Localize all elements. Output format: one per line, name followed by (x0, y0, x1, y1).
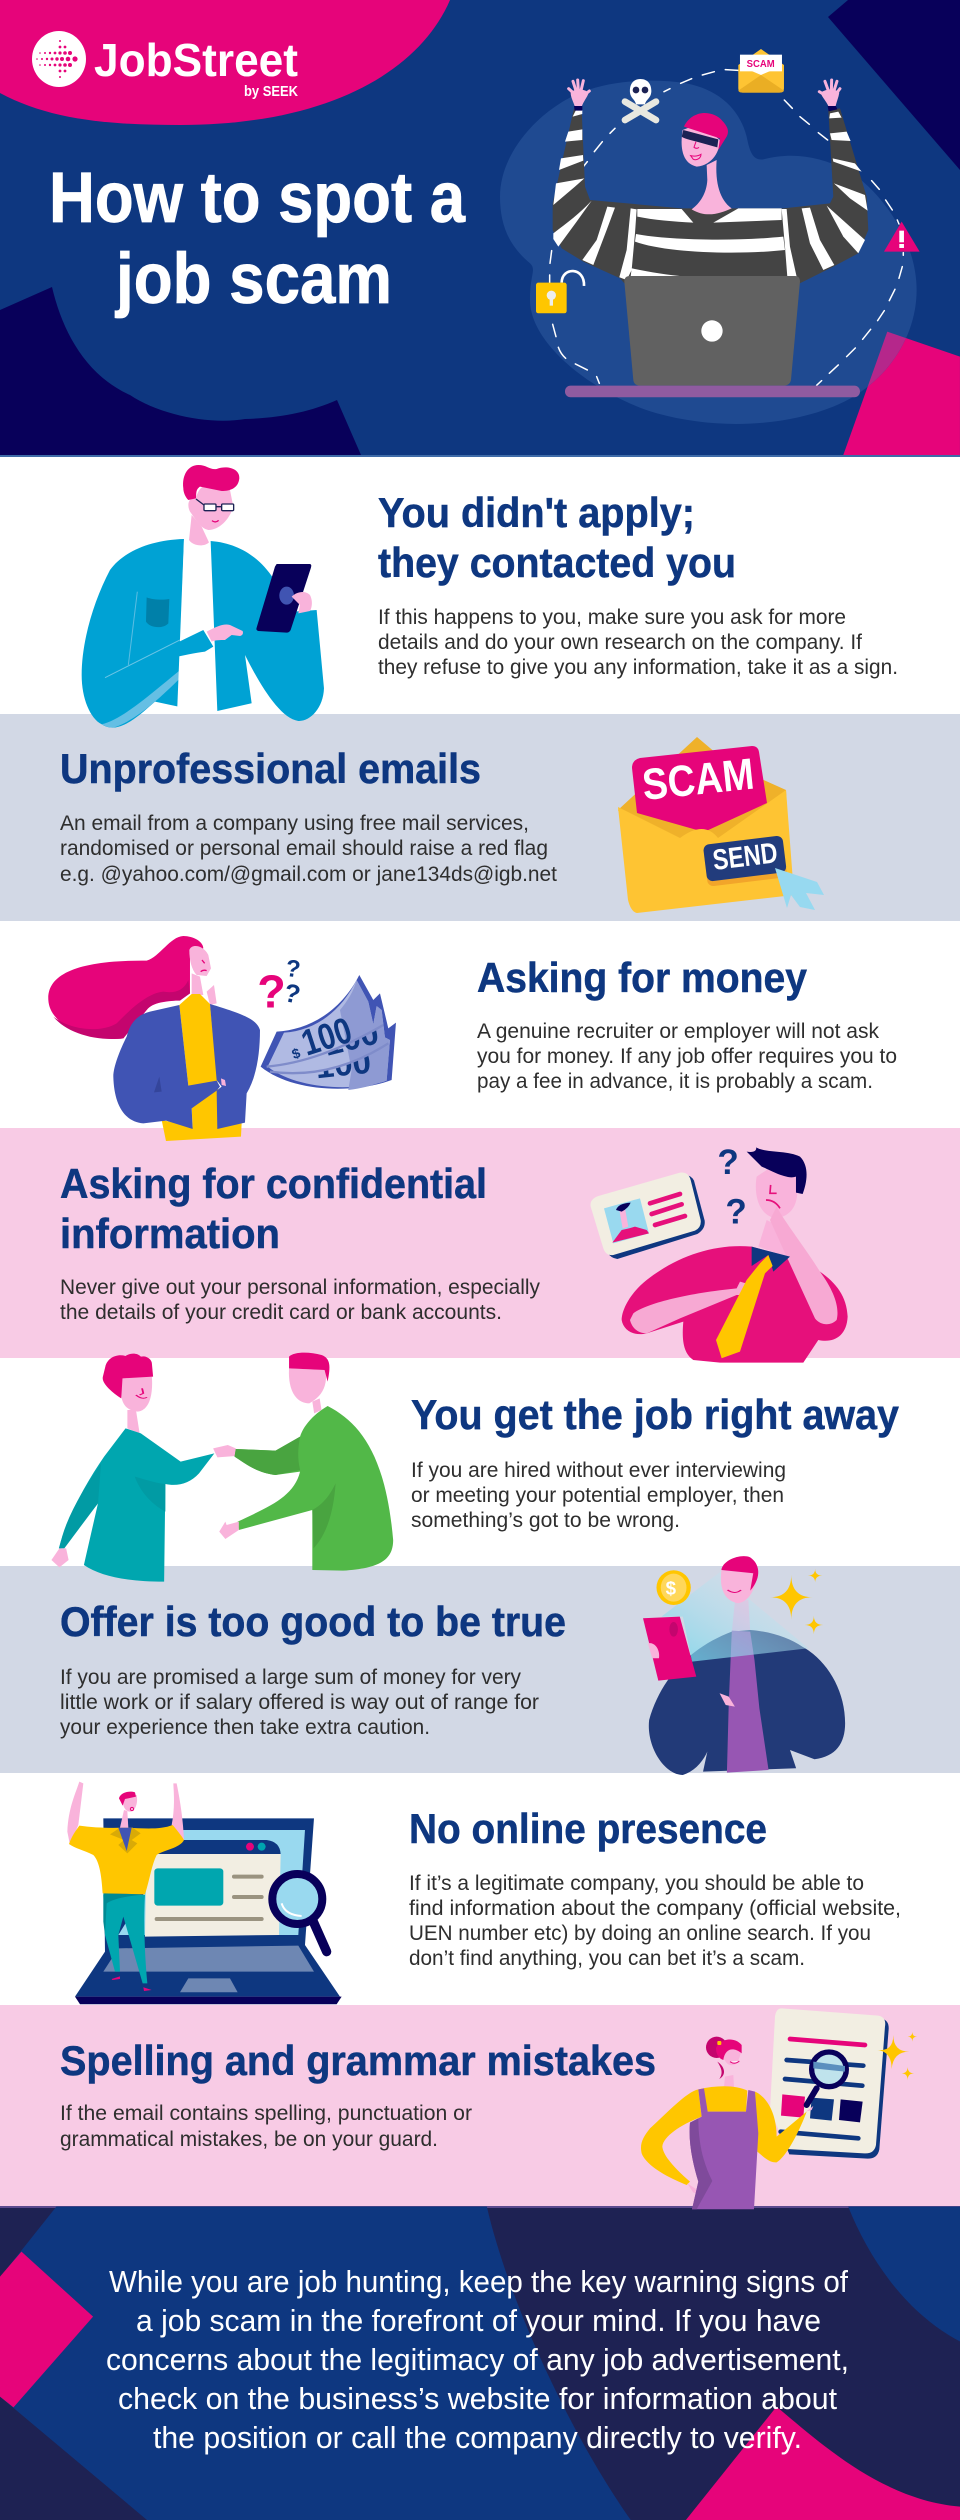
body text (60, 2102, 472, 2151)
panel: asking for confidential information (0, 1128, 960, 1358)
banknotes: $ (290, 1044, 303, 1062)
closing message (106, 2264, 849, 2455)
heading: You get the job right away (411, 1391, 900, 1438)
heading: You didn't apply; (378, 489, 695, 536)
head (692, 160, 732, 214)
magnifier (807, 2052, 846, 2105)
panel: asking for money (0, 921, 960, 1128)
body text: If this happens to you, make sure you ask for more (378, 606, 846, 629)
body text: UEN number etc) by doing an online search. If you (409, 1922, 871, 1945)
closing message: the position or call the company directly to verify. (153, 2420, 802, 2455)
question marks: ? (257, 965, 286, 1017)
illustration: laptop with magnifier and man (67, 1782, 342, 2004)
illustration: scammer at laptop (500, 49, 960, 455)
body text: If it’s a legitimate company, you should be able to (409, 1872, 864, 1895)
icon: open padlock (536, 271, 584, 313)
logo: by SEEK (244, 83, 298, 100)
dashed route (550, 70, 903, 385)
banknotes: 100 (320, 1014, 383, 1064)
body text: A genuine recruiter or employer will not ask (477, 1020, 879, 1043)
gold coin (656, 1570, 691, 1605)
body text: your experience then take extra caution. (60, 1716, 430, 1739)
dark navy shape left (0, 287, 361, 455)
sparkles (877, 2032, 917, 2080)
body text: little work or if salary offered is way out of range for (60, 1691, 539, 1714)
banknotes (261, 975, 396, 1090)
question marks: ? (725, 1192, 747, 1231)
magnifier (272, 1874, 327, 1952)
title (49, 159, 465, 319)
body text: If the email contains spelling, punctuation or (60, 2102, 472, 2125)
man (67, 1782, 184, 1991)
body text: details and do your own research on the company. If (378, 631, 862, 654)
body text: you for money. If any job offer requires you to (477, 1045, 897, 1068)
heading: they contacted you (378, 539, 736, 586)
illustration: man with tablet (82, 465, 324, 728)
body text (60, 1666, 539, 1739)
panel: offer is too good to be true (0, 1566, 960, 1773)
illustration: scam envelope with send button (618, 737, 824, 913)
panel: hero header (0, 0, 960, 457)
sparkles (770, 1569, 823, 1634)
question marks (717, 1143, 747, 1231)
icon: warning triangle (884, 222, 920, 252)
ID card (590, 1173, 705, 1259)
closing message: concerns about the legitimacy of any job advertisement, (106, 2342, 849, 2377)
title: job scam (114, 240, 392, 319)
body text: If you are hired without ever interviewing (411, 1459, 786, 1482)
body text: An email from a company using free mail services, (60, 812, 529, 835)
body text: Never give out your personal information, especially (60, 1276, 540, 1299)
heading: Asking for confidential (60, 1160, 487, 1207)
body with stripes (553, 108, 868, 283)
body text: pay a fee in advance, it is probably a scam. (477, 1070, 873, 1093)
panel: footer (0, 2206, 960, 2520)
panel: spelling and grammar mistakes (0, 2005, 960, 2206)
question marks: ? (717, 1143, 739, 1182)
illustration: man looking at phone (643, 1556, 845, 1775)
body text: they refuse to give you any information, take it as a sign. (378, 656, 898, 679)
woman (641, 2037, 813, 2209)
heading: Unprofessional emails (60, 745, 481, 792)
body text (60, 1276, 540, 1324)
body text: or meeting your potential employer, then (411, 1484, 784, 1507)
heading: Asking for money (477, 954, 808, 1001)
closing message: check on the business’s website for information about (118, 2381, 837, 2416)
banknotes: 100 (296, 1009, 357, 1064)
laptop (624, 276, 800, 386)
body text: randomised or personal email should raise a red flag (60, 837, 548, 860)
body text (409, 1872, 901, 1970)
closing message: While you are job hunting, keep the key warning signs of (109, 2264, 848, 2299)
panel: unprofessional emails (0, 714, 960, 921)
illustration: thinking man with ID card (590, 1143, 848, 1363)
heading (60, 1160, 487, 1257)
question marks: ? (284, 955, 302, 984)
dark navy shape top right (828, 0, 960, 170)
question marks: ? (281, 977, 303, 1010)
gold coin: $ (666, 1578, 676, 1599)
icon: skull (625, 79, 656, 120)
title: How to spot a (49, 159, 465, 238)
icon: scam envelope (738, 49, 784, 93)
logo (32, 31, 298, 100)
body text (60, 812, 557, 886)
body text: e.g. @yahoo.com/@gmail.com or jane134ds@igb.net (60, 863, 557, 886)
document (770, 2008, 889, 2159)
illustration: woman with money (48, 936, 396, 1141)
heading: information (60, 1210, 280, 1257)
illustration: two people shaking hands (51, 1353, 393, 1582)
illustration: woman inspecting document (641, 2008, 917, 2209)
pink corner shape (0, 0, 450, 125)
heading: Spelling and grammar mistakes (60, 2037, 656, 2084)
heading: Offer is too good to be true (60, 1598, 566, 1645)
body text: don’t find anything, you can bet it’s a scam. (409, 1947, 805, 1970)
hands (569, 80, 840, 106)
heading: No online presence (409, 1805, 767, 1852)
icon: scam envelope: SCAM (747, 59, 775, 70)
question marks (257, 955, 303, 1017)
body text (378, 606, 898, 679)
panel: you get the job right away (0, 1358, 960, 1566)
body text: If you are promised a large sum of money for very (60, 1666, 521, 1689)
body text (411, 1459, 786, 1532)
illustration: scam envelope with send button: SCAM (640, 750, 756, 810)
body text: something’s got to be wrong. (411, 1509, 680, 1532)
body text: grammatical mistakes, be on your guard. (60, 2128, 438, 2151)
closing message: a job scam in the forefront of your mind. If you have (136, 2303, 821, 2338)
banknotes: 100 (314, 1044, 373, 1086)
panel: no online presence (0, 1773, 960, 2005)
panel: you didn't apply (0, 457, 960, 714)
illustration: scam envelope with send button: SEND (711, 837, 779, 877)
logo: JobStreet (94, 34, 298, 86)
body text: the details of your credit card or bank accounts. (60, 1301, 502, 1324)
body text: find information about the company (official website, (409, 1897, 901, 1920)
heading (378, 489, 736, 586)
body text (477, 1020, 897, 1093)
